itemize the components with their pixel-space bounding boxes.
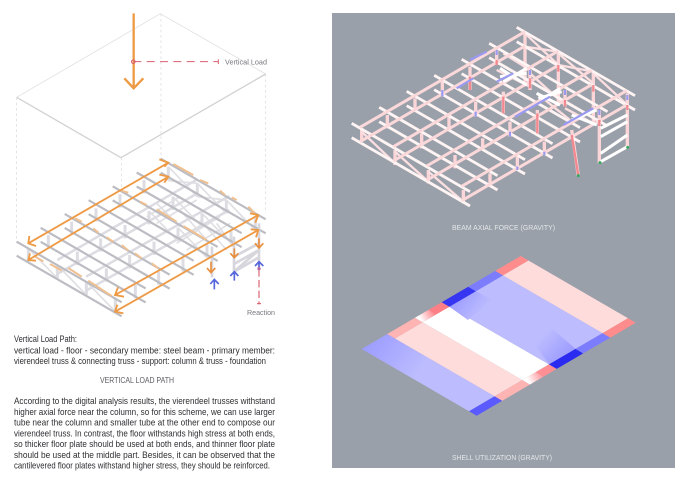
text block: analysis paragraph: tube near the column and smaller tube at the other end to compose our — [14, 418, 275, 428]
text block: analysis paragraph: should be used at the middle part. Besides, it can be observed that the — [14, 450, 275, 461]
truss diagonals — [362, 33, 627, 202]
caption: beam axial force: BEAM AXIAL FORCE (GRAVITY) — [452, 223, 555, 232]
band: left blue — [362, 334, 495, 411]
pale blue force segments — [442, 50, 627, 170]
text block: analysis paragraph — [14, 396, 275, 472]
caption: shell utilization: SHELL UTILIZATION (GRAVITY) — [452, 453, 552, 462]
orange load path on trusses — [35, 164, 255, 296]
column members — [362, 32, 627, 203]
vertical struts — [28, 167, 255, 312]
pale red column members — [470, 60, 627, 176]
secondary beams — [352, 27, 635, 206]
heading: vertical load path: VERTICAL LOAD PATH — [100, 376, 174, 385]
band: white centre — [423, 307, 549, 380]
text block: vertical load path summary: Vertical Load Path: — [14, 334, 77, 345]
white stress-free truss zones — [500, 68, 627, 162]
text block: vertical load path summary: vierendeel truss & connecting truss - support: column & truss - foundation — [14, 356, 266, 367]
cross beams — [360, 32, 627, 201]
panel: load path diagram — [17, 13, 275, 317]
secondary steel beams — [17, 159, 266, 316]
band: pink — [395, 322, 522, 396]
chart: shell utilization plate — [362, 256, 636, 416]
text block: analysis paragraph: vierendeel truss. In contrast, the floor withstands high stress at both ends, — [14, 428, 275, 440]
text block: vertical load path summary — [14, 334, 275, 367]
leader: reaction — [257, 267, 261, 304]
diagram: steel structure with load path — [17, 159, 266, 316]
band: blue — [449, 275, 603, 364]
columns and support truss — [212, 223, 259, 277]
leader: vertical load — [131, 59, 218, 64]
diagram: isometric floor plate and vertical load arrow — [17, 13, 266, 243]
label: reaction: Reaction — [247, 308, 275, 317]
arrow: vertical load — [124, 13, 143, 88]
band: far pink — [503, 260, 628, 333]
text block: analysis paragraph: cantilevered floor plates withstand higher stress, they should be reinforced. — [14, 460, 270, 472]
cross beams — [57, 179, 229, 291]
green support nodes — [577, 146, 629, 177]
blue reaction arrows — [210, 262, 263, 289]
chart: beam axial force model — [352, 27, 635, 206]
text block: analysis paragraph: higher axial force near the column, so for this scheme, we can use larger — [14, 407, 275, 418]
panel: analysis results — [332, 13, 675, 468]
edge strip: lower — [469, 318, 636, 416]
text block: analysis paragraph: so thicker floor plate should be used at both ends, and thinner floor plate — [14, 439, 275, 450]
label: vertical load: Vertical Load — [225, 58, 267, 66]
orange primary member arrows — [28, 159, 258, 313]
floor plate outline — [17, 14, 266, 158]
blue stress gradient near lower edge — [535, 325, 576, 364]
orange downward arrows at columns — [207, 238, 263, 273]
edge strip: upper — [387, 256, 528, 338]
text block: analysis paragraph: According to the digital analysis results, the vierendeel trusses withstand — [14, 396, 275, 407]
dashed projection lines — [17, 14, 266, 243]
text block: vertical load path summary: vertical load - floor - secondary membe: steel beam - primary member: — [14, 346, 275, 356]
truss bracing — [28, 167, 255, 312]
blue stress gradient near upper edge — [449, 291, 492, 320]
